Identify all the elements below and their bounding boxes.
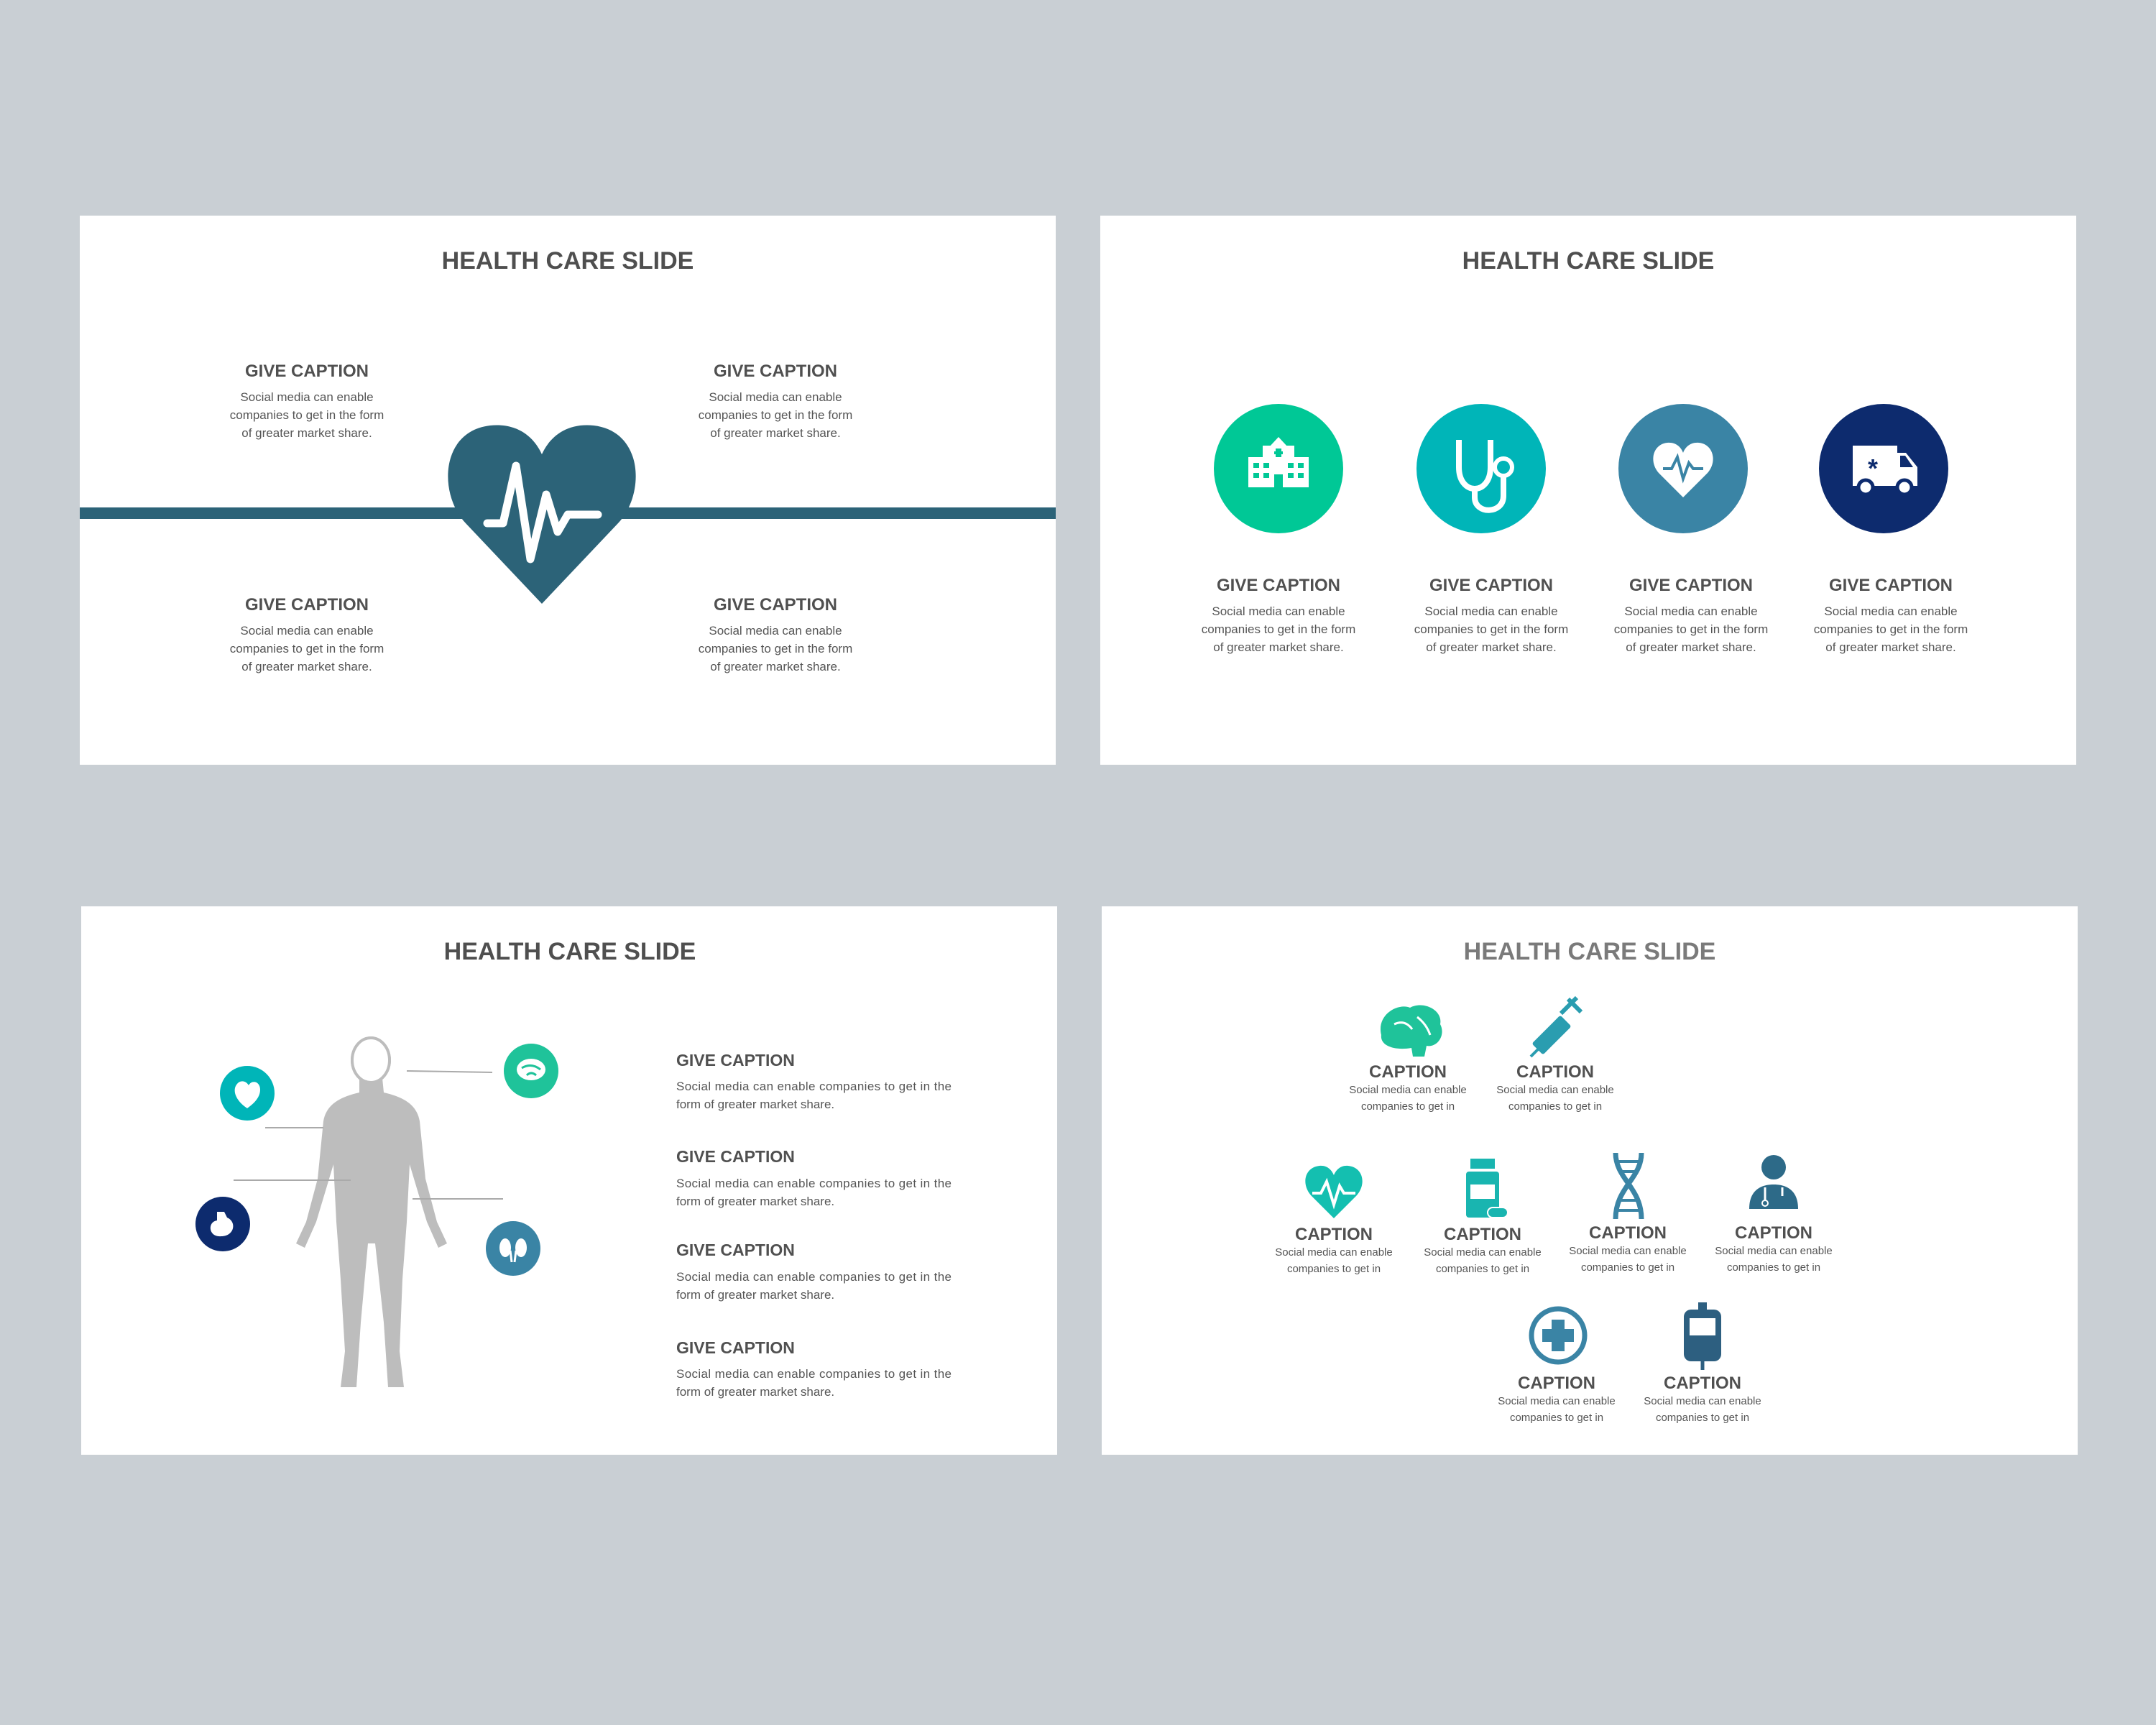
icon: hospital	[1214, 404, 1343, 533]
item: IV bag	[1644, 1302, 1761, 1424]
caption top-right: of greater market share.	[710, 426, 841, 440]
item: medicine bottle: Social media can enable	[1424, 1246, 1542, 1259]
caption 2: companies to get in the form	[1414, 622, 1568, 636]
icon: ambulance: *	[1868, 454, 1878, 483]
connector lines	[234, 1071, 503, 1199]
item: doctor: Social media can enable	[1715, 1245, 1833, 1257]
caption 4: Social media can enable companies to get in the	[676, 1367, 952, 1381]
timeline line	[80, 507, 1056, 519]
caption 2: of greater market share.	[1426, 640, 1557, 654]
caption 2	[676, 1147, 952, 1208]
caption top-right: GIVE CAPTION	[714, 362, 837, 381]
item: heart: Social media can enable	[1275, 1246, 1393, 1259]
item: DNA: Social media can enable	[1569, 1245, 1687, 1257]
title: HEALTH CARE SLIDE	[444, 938, 696, 965]
item: medicine bottle: CAPTION	[1444, 1225, 1521, 1244]
caption 3: companies to get in the form	[1614, 622, 1768, 636]
item: DNA: companies to get in	[1581, 1261, 1674, 1274]
icon: stomach	[195, 1197, 250, 1251]
caption top-left	[230, 362, 384, 440]
title: HEALTH CARE SLIDE	[1462, 247, 1714, 275]
caption 4	[1814, 576, 1968, 654]
caption 4: of greater market share.	[1825, 640, 1956, 654]
caption 2: Social media can enable	[1424, 604, 1558, 618]
caption 3: GIVE CAPTION	[676, 1241, 795, 1259]
caption bottom-left: companies to get in the form	[230, 642, 384, 656]
icon: kidneys	[486, 1221, 540, 1276]
icon: heart pulse	[1618, 404, 1748, 533]
item: DNA	[1569, 1153, 1687, 1274]
item: heart: CAPTION	[1295, 1225, 1373, 1244]
caption 2: form of greater market share.	[676, 1195, 834, 1208]
caption 1: form of greater market share.	[676, 1098, 834, 1111]
icon: heart with pulse	[448, 426, 636, 604]
item: brain: Social media can enable	[1349, 1084, 1467, 1096]
item: medical cross: companies to get in	[1510, 1412, 1603, 1424]
caption 3: form of greater market share.	[676, 1288, 834, 1302]
caption 4: GIVE CAPTION	[676, 1338, 795, 1357]
caption 1: GIVE CAPTION	[1217, 576, 1340, 595]
item: syringe	[1496, 998, 1614, 1113]
caption 1: GIVE CAPTION	[676, 1051, 795, 1070]
title: HEALTH CARE SLIDE	[442, 247, 694, 275]
caption bottom-right: Social media can enable	[709, 624, 842, 638]
item: IV bag: companies to get in	[1656, 1412, 1749, 1424]
caption 2: GIVE CAPTION	[676, 1147, 795, 1166]
caption bottom-left: GIVE CAPTION	[245, 595, 369, 615]
caption 3	[676, 1241, 952, 1302]
item: IV bag: Social media can enable	[1644, 1395, 1761, 1407]
item: brain: CAPTION	[1369, 1062, 1447, 1082]
item: IV bag: CAPTION	[1664, 1374, 1741, 1393]
caption 4: Social media can enable	[1824, 604, 1958, 618]
caption 2: GIVE CAPTION	[1429, 576, 1553, 595]
caption bottom-right: companies to get in the form	[699, 642, 852, 656]
item: medical cross	[1498, 1309, 1616, 1424]
caption 1: of greater market share.	[1213, 640, 1344, 654]
icon: heart organ	[220, 1066, 275, 1121]
item: DNA: CAPTION	[1589, 1223, 1667, 1243]
caption 1: Social media can enable companies to get in the	[676, 1080, 952, 1093]
caption 2	[1414, 576, 1568, 654]
caption 3: Social media can enable companies to get in the	[676, 1270, 952, 1284]
caption 2: Social media can enable companies to get in the	[676, 1177, 952, 1190]
caption bottom-right	[699, 595, 852, 673]
caption bottom-left	[230, 595, 384, 673]
icon: stethoscope	[1416, 404, 1546, 533]
panel: four circle icons	[1100, 216, 2076, 765]
item: doctor: CAPTION	[1735, 1223, 1812, 1243]
human silhouette	[296, 1036, 447, 1387]
caption bottom-left: of greater market share.	[241, 660, 372, 673]
panel: human body	[81, 906, 1057, 1455]
caption 3: GIVE CAPTION	[1629, 576, 1753, 595]
item: medicine bottle: companies to get in	[1436, 1263, 1529, 1275]
panel: heart slide	[80, 216, 1056, 765]
caption top-left: Social media can enable	[240, 390, 374, 404]
item: heart	[1275, 1166, 1393, 1275]
item: brain	[1349, 1006, 1467, 1113]
item: medicine bottle	[1424, 1159, 1542, 1275]
caption top-right: companies to get in the form	[699, 408, 852, 422]
caption top-right	[699, 362, 852, 440]
caption bottom-right: GIVE CAPTION	[714, 595, 837, 615]
caption 1	[676, 1051, 952, 1111]
caption 3: Social media can enable	[1624, 604, 1758, 618]
caption top-left: GIVE CAPTION	[245, 362, 369, 381]
caption 1: companies to get in the form	[1202, 622, 1355, 636]
icon: brain	[504, 1044, 558, 1098]
title: HEALTH CARE SLIDE	[1464, 938, 1715, 965]
caption top-left: companies to get in the form	[230, 408, 384, 422]
caption 1	[1202, 576, 1355, 654]
icon: ambulance	[1819, 404, 1948, 533]
item: syringe: companies to get in	[1508, 1100, 1602, 1113]
item: heart: companies to get in	[1287, 1263, 1381, 1275]
caption 3: of greater market share.	[1626, 640, 1756, 654]
caption bottom-left: Social media can enable	[240, 624, 374, 638]
caption 1: Social media can enable	[1212, 604, 1345, 618]
item: syringe: Social media can enable	[1496, 1084, 1614, 1096]
item: syringe: CAPTION	[1516, 1062, 1594, 1082]
caption 4: GIVE CAPTION	[1829, 576, 1953, 595]
caption 4	[676, 1338, 952, 1399]
caption bottom-right: of greater market share.	[710, 660, 841, 673]
item: medical cross: CAPTION	[1518, 1374, 1595, 1393]
item: doctor	[1715, 1155, 1833, 1274]
caption 3	[1614, 576, 1768, 654]
caption 4: form of greater market share.	[676, 1385, 834, 1399]
caption top-right: Social media can enable	[709, 390, 842, 404]
caption top-left: of greater market share.	[241, 426, 372, 440]
panel: icon grid	[1102, 906, 2078, 1455]
item: medical cross: Social media can enable	[1498, 1395, 1616, 1407]
item: doctor: companies to get in	[1727, 1261, 1820, 1274]
item: brain: companies to get in	[1361, 1100, 1455, 1113]
caption 4: companies to get in the form	[1814, 622, 1968, 636]
